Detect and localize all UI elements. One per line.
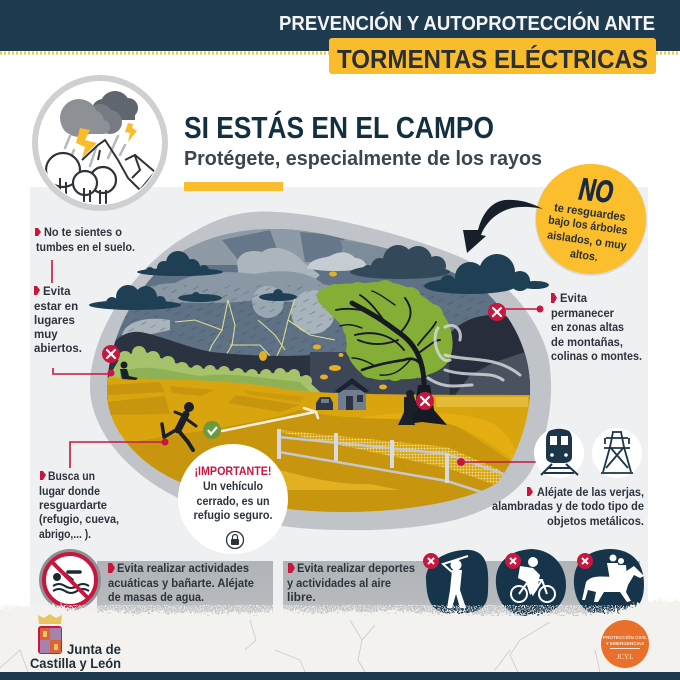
text: evita lugares abiertos: lugares: [34, 315, 75, 327]
car: [316, 397, 333, 410]
text: aléjate de las verjas: [492, 487, 644, 528]
sitting person: [120, 362, 138, 380]
text: evita lugares abiertos: [34, 286, 82, 355]
connector: fence: [457, 458, 537, 466]
text: evita actividades acuáticas: acuáticas y bañarte. Aléjate: [108, 576, 254, 590]
heading: SI ESTÁS EN EL CAMPO: [184, 110, 494, 145]
callout: NO under trees: [535, 164, 647, 276]
tree trunk and branches: [336, 291, 440, 392]
lightning bolts: [175, 298, 335, 362]
icon: storm over mountain and trees: [32, 75, 168, 211]
text: aléjate de las verjas: alambradas y de todo tipo de: [492, 501, 644, 513]
text: evita zonas altas: en zonas altas: [551, 322, 624, 334]
trunk base: [398, 385, 447, 425]
text: evita lugares abiertos: estar en: [34, 301, 78, 313]
wind swooshes: [428, 325, 520, 386]
yellow field: [100, 377, 540, 520]
text: evita zonas altas: Evita: [560, 293, 588, 305]
callout: importante vehicle: cerrado, es un: [196, 494, 270, 508]
logo text: Junta de Castilla y León: [30, 641, 121, 671]
text: aléjate de las verjas: objetos metálicos.: [547, 516, 644, 528]
cracked ground strip: [0, 600, 680, 680]
bush shading: [120, 368, 310, 392]
darker foreground: [127, 410, 511, 512]
callout: importante vehicle: [178, 444, 288, 554]
fence: [277, 429, 504, 492]
callout: importante vehicle: refugio seguro.: [194, 508, 272, 522]
text: evita deportes: [287, 561, 415, 604]
arrow: points from callout to tree: [463, 200, 543, 253]
badge: high ground: [488, 303, 506, 321]
logo text: Junta de Castilla y León: Junta de: [67, 641, 121, 657]
icon: no swimming: [39, 549, 101, 611]
field patches: [105, 382, 305, 415]
logo: coat of arms: [38, 614, 62, 654]
header title line: PREVENCIÓN Y AUTOPROTECCIÓN ANTE: [279, 11, 655, 35]
text: no te sientes: [35, 227, 135, 254]
leaves: [259, 272, 387, 390]
connector: field warning: [52, 260, 114, 376]
cloud: lower right: [424, 254, 549, 294]
panel: water activities text box: [97, 561, 273, 616]
sky: [107, 229, 530, 405]
text: busca un lugar: Busca un: [48, 471, 95, 483]
text: busca un lugar: resguardarte: [39, 500, 107, 512]
text: busca un lugar: (refugio, cueva,: [39, 514, 119, 526]
badge: tree: [416, 392, 434, 410]
logo: protección civil: JCYL: [617, 653, 633, 661]
light storm clouds: [122, 229, 388, 336]
icon: horse riding prohibited: [574, 549, 644, 616]
logo: protección civil: Y EMERGENCIAS: [606, 641, 644, 646]
callout: NO under trees: NO: [577, 171, 615, 210]
grey blob ring: [90, 212, 551, 530]
text: evita zonas altas: colinas o montes.: [551, 351, 642, 363]
connector: high ground: [497, 306, 544, 312]
badge: safe check: [203, 421, 221, 439]
text: busca un lugar: [39, 471, 119, 541]
house: [335, 378, 369, 410]
icon: cycling prohibited: [496, 549, 566, 616]
tree canopy: [317, 280, 453, 381]
storm clouds over ring: [89, 245, 549, 310]
callout: NO under trees: altos.: [569, 248, 599, 264]
icon: train: [534, 428, 584, 478]
cloud: upper right: [350, 245, 450, 279]
cloud: upper left: [137, 251, 223, 276]
text: evita zonas altas: [551, 293, 642, 363]
yellow accent bar: [184, 182, 283, 191]
text: evita lugares abiertos: Evita: [43, 286, 71, 298]
badge: open field: [102, 345, 120, 363]
text: aléjate de las verjas: Aléjate de las verjas,: [537, 487, 644, 499]
text: evita zonas altas: de montañas,: [551, 337, 623, 349]
logo: protección civil: PROTECCIÓN CIVIL: [603, 633, 647, 640]
icon: lock: [226, 532, 244, 548]
distant tall grass: [436, 397, 528, 407]
panel: sports text box: [283, 561, 640, 616]
subheading: Protégete, especialmente de los rayos: [184, 148, 542, 170]
text: no te sientes: No te sientes o: [44, 227, 122, 239]
white path arrow: [222, 408, 318, 431]
callout: NO under trees: bajo los árboles: [547, 214, 628, 237]
text: evita lugares abiertos: abiertos.: [34, 343, 82, 355]
logo text: Junta de Castilla y León: Castilla y León: [30, 655, 121, 671]
dark ground behind tree: [310, 352, 535, 402]
text: evita actividades acuáticas: [108, 561, 254, 604]
crouching person: [398, 390, 416, 425]
icon: power pylon: [592, 428, 642, 478]
text: evita deportes: libre.: [287, 590, 316, 604]
logo: protección civil: [601, 620, 649, 668]
text: evita zonas altas: permanecer: [551, 308, 614, 320]
text: busca un lugar: lugar donde: [39, 486, 100, 498]
callout: importante vehicle: ¡IMPORTANTE!: [194, 464, 272, 478]
callout: NO under trees: te resguardes: [553, 202, 626, 224]
connector: shelter: [70, 438, 168, 468]
cloud: lower left: [89, 285, 181, 310]
text: evita actividades acuáticas: de masas de agua.: [108, 590, 204, 604]
header yellow label: TORMENTAS ELÉCTRICAS: [337, 44, 648, 74]
icon: golf prohibited: [423, 550, 488, 614]
grey distant hills: [455, 352, 535, 395]
callout: importante vehicle: Un vehículo: [203, 479, 263, 493]
text: evita deportes: Evita realizar deportes: [297, 561, 415, 575]
dark hill right: [448, 315, 530, 400]
rain hatch over sky: [116, 285, 493, 356]
green bushes: [107, 346, 320, 398]
text: no te sientes: tumbes en el suelo.: [36, 242, 135, 254]
text: evita deportes: y actividades al aire: [287, 576, 391, 590]
text: evita lugares abiertos: muy: [34, 329, 58, 341]
callout: NO under trees: aislados, o muy: [546, 229, 628, 253]
text: busca un lugar: abrigo,... ).: [39, 529, 91, 541]
panel: grey content background: [30, 187, 648, 617]
dark mountain band: [107, 332, 310, 400]
text: evita actividades acuáticas: Evita realizar actividades: [117, 561, 249, 575]
illustration: storm scene: [107, 229, 530, 512]
runner: [162, 402, 196, 450]
header band: [0, 0, 680, 54]
footer band: [0, 672, 680, 680]
small clouds: [178, 289, 297, 302]
tall grass highlight: [280, 470, 400, 490]
